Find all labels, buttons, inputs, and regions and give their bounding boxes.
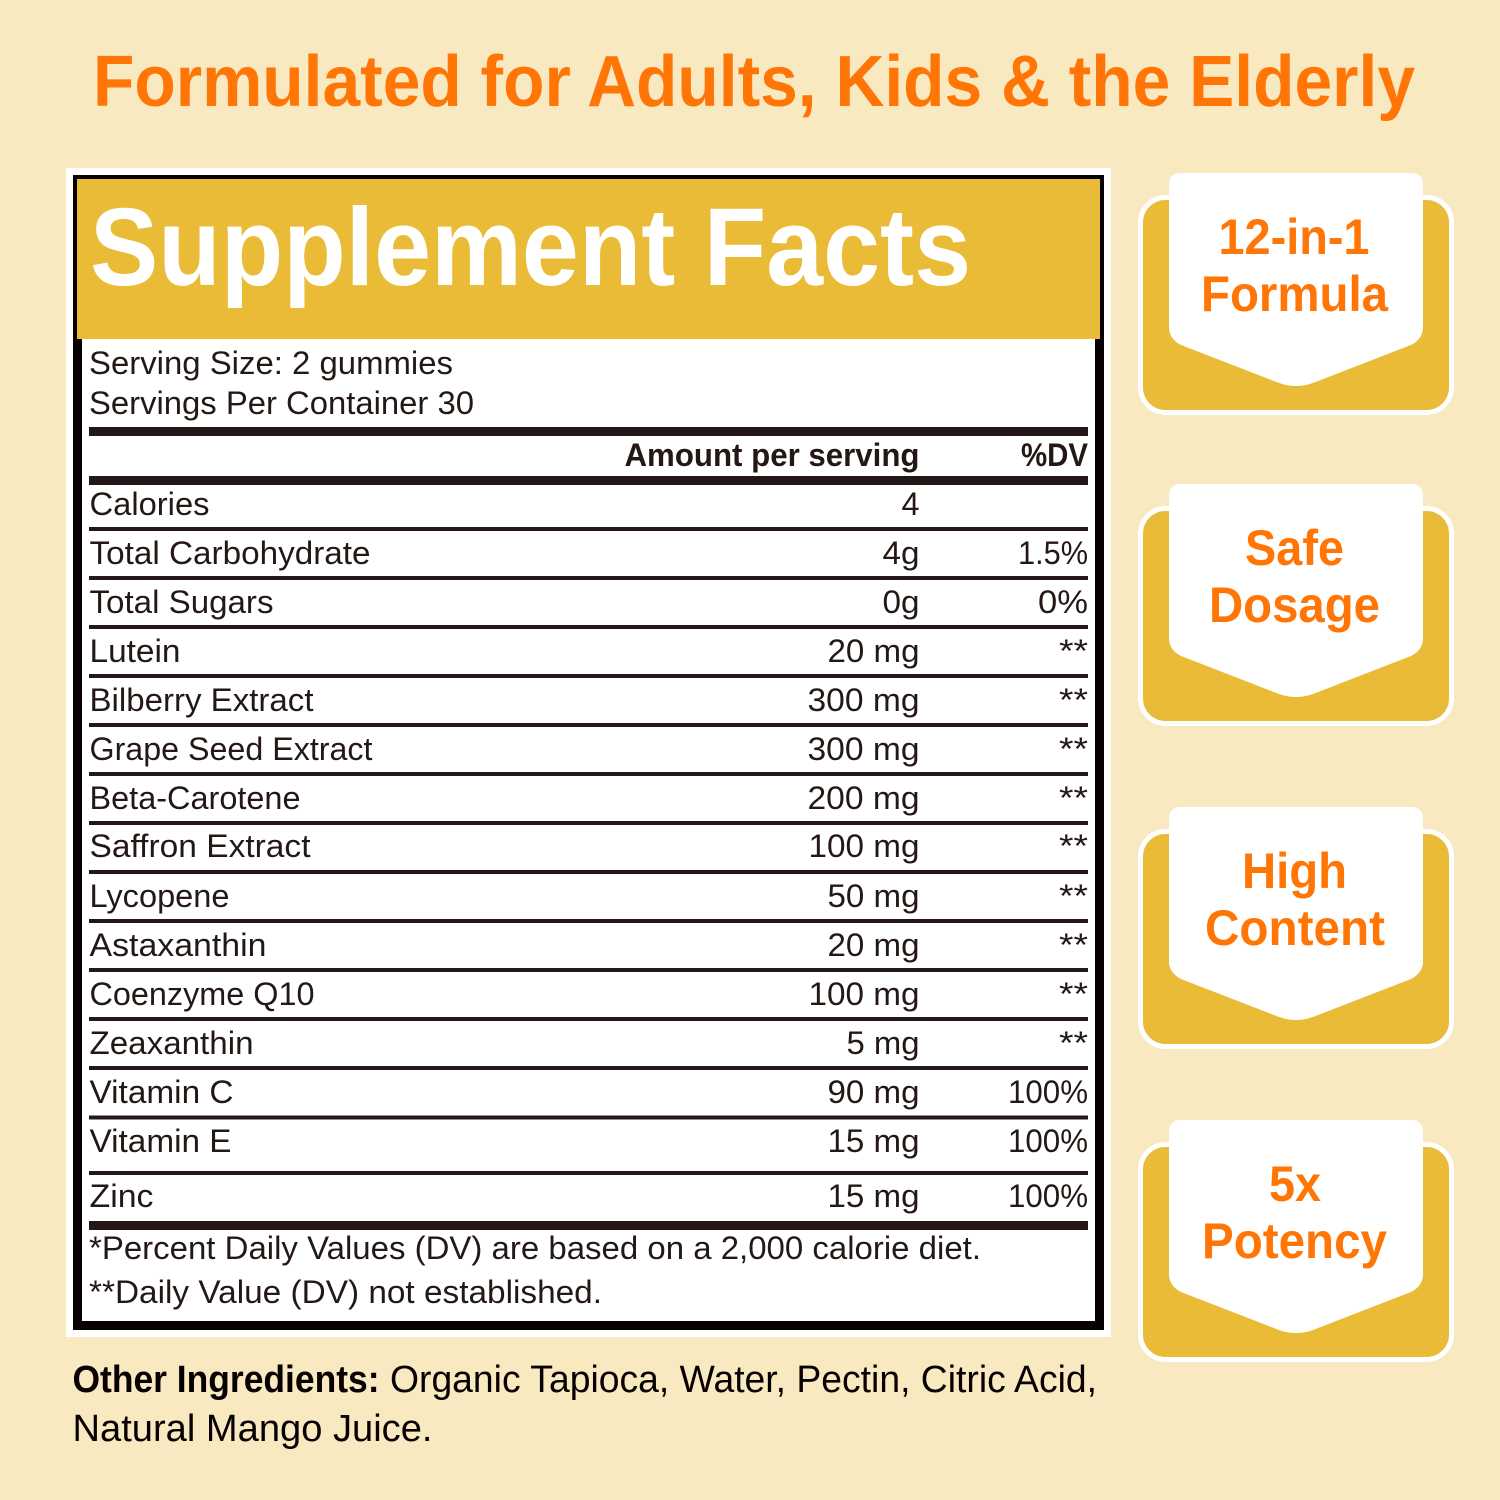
nutrient table: ** — [1059, 878, 1088, 914]
nutrient table: 50 mg — [828, 878, 920, 914]
nutrient table: Vitamin C — [90, 1074, 234, 1110]
badge: 12-in-1 formula: Formula — [1201, 266, 1389, 322]
footnotes — [89, 1230, 981, 1310]
title: Formulated for Adults, Kids & the Elderly — [93, 42, 1415, 122]
other ingredients text: Other Ingredients: — [72, 1359, 380, 1401]
nutrient table: ** — [1059, 927, 1088, 963]
nutrient table: 300 mg — [808, 682, 920, 718]
serving information: Serving Size: 2 gummies — [89, 345, 453, 381]
nutrient table: Saffron Extract — [90, 828, 311, 864]
nutrient table: ** — [1059, 731, 1088, 767]
column headings: %DV — [1021, 437, 1089, 473]
footnotes: **Daily Value (DV) not established. — [89, 1274, 602, 1310]
nutrient table: Total Carbohydrate — [90, 535, 370, 571]
nutrient table: Astaxanthin — [90, 927, 266, 963]
other ingredients text: Organic Tapioca, Water, Pectin, Citric Acid, — [390, 1359, 1097, 1401]
nutrient table: Zeaxanthin — [90, 1025, 254, 1061]
nutrient table: ** — [1059, 633, 1088, 669]
nutrient table: 1.5% — [1018, 535, 1088, 571]
nutrient table: ** — [1059, 780, 1088, 816]
heading: supplement facts: Supplement Facts — [90, 186, 971, 309]
other ingredients text: Natural Mango Juice. — [72, 1408, 432, 1450]
nutrient table: Lutein — [90, 633, 180, 669]
column headings: Amount per serving — [624, 437, 920, 473]
nutrient table: Calories — [90, 486, 210, 522]
nutrient table: 100 mg — [808, 976, 920, 1012]
panel: supplement facts label — [66, 168, 1111, 1337]
nutrient table: Lycopene — [90, 878, 230, 914]
nutrient table: 100% — [1008, 1178, 1088, 1214]
nutrient table: Grape Seed Extract — [90, 731, 373, 767]
label white frame — [66, 168, 1111, 1337]
badge: 5x potency — [1140, 1120, 1452, 1360]
nutrient table: Vitamin E — [90, 1123, 232, 1159]
nutrient table: 300 mg — [808, 731, 920, 767]
badge: 12-in-1 formula: 12-in-1 — [1218, 209, 1370, 265]
badge: high content: High — [1242, 843, 1347, 899]
nutrient table: 90 mg — [828, 1074, 920, 1110]
nutrient table: Zinc — [90, 1178, 154, 1214]
nutrient table: 4g — [882, 535, 920, 571]
nutrient table: ** — [1059, 1025, 1088, 1061]
serving information: Servings Per Container 30 — [89, 385, 474, 421]
nutrient table: Total Sugars — [90, 584, 274, 620]
label black border — [78, 180, 1100, 1326]
badge: 5x potency: 5x — [1269, 1156, 1321, 1212]
nutrient table: Bilberry Extract — [90, 682, 314, 718]
nutrient table: Beta-Carotene — [90, 780, 300, 816]
badge: safe dosage: Dosage — [1209, 577, 1380, 633]
nutrient table: 15 mg — [828, 1178, 920, 1214]
badge: high content — [1140, 807, 1452, 1046]
nutrient table: ** — [1059, 682, 1088, 718]
nutrient table: 100 mg — [808, 828, 920, 864]
nutrient table — [89, 486, 1088, 1214]
nutrient table: 15 mg — [828, 1123, 920, 1159]
nutrient table: 100% — [1008, 1074, 1088, 1110]
nutrient table: 200 mg — [808, 780, 920, 816]
badge: 5x potency: Potency — [1202, 1213, 1387, 1269]
nutrient table: 20 mg — [828, 927, 920, 963]
badge: 12-in-1 formula — [1140, 173, 1452, 412]
other ingredients text — [72, 1359, 1097, 1450]
nutrient table: ** — [1059, 828, 1088, 864]
badge: high content: Content — [1205, 900, 1385, 956]
nutrient table: Coenzyme Q10 — [90, 976, 314, 1012]
nutrient table: 0% — [1038, 584, 1088, 620]
serving information — [89, 345, 474, 421]
badge: safe dosage: Safe — [1245, 520, 1344, 576]
nutrient table: 5 mg — [846, 1025, 920, 1061]
nutrient table: 20 mg — [828, 633, 920, 669]
nutrient table: ** — [1059, 976, 1088, 1012]
nutrient table: 4 — [902, 486, 920, 522]
nutrient table: 0g — [882, 584, 920, 620]
nutrient table: 100% — [1008, 1123, 1088, 1159]
header band — [77, 179, 1100, 339]
badge: safe dosage — [1140, 484, 1452, 724]
footnotes: *Percent Daily Values (DV) are based on a 2,000 calorie diet. — [89, 1230, 981, 1266]
column headings — [624, 437, 1089, 473]
